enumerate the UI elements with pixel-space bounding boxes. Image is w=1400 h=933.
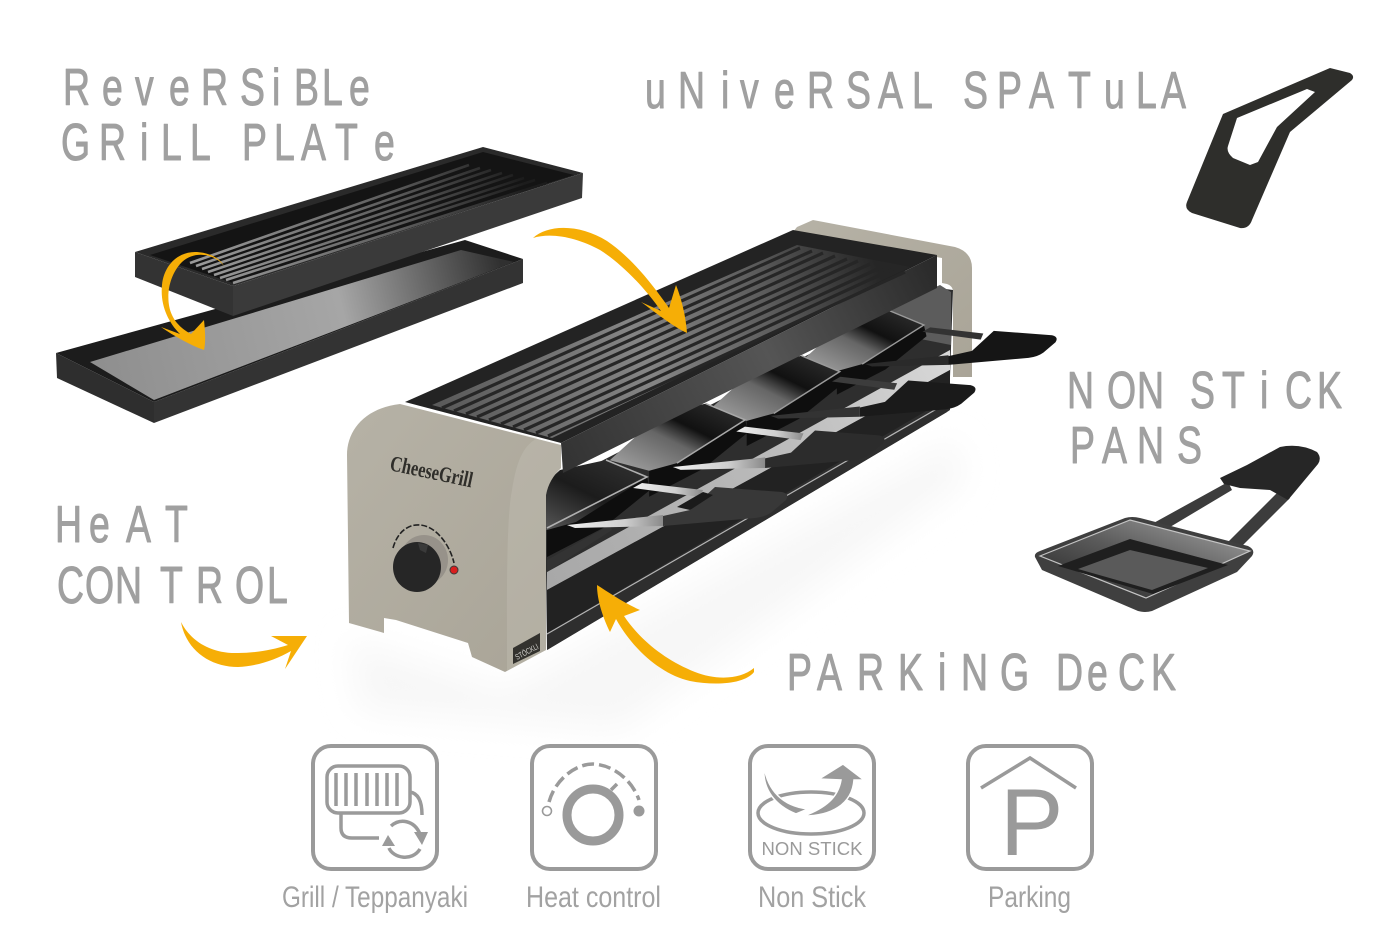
heading: heat control: HeAT [55,495,188,553]
icon: non stick: NON STICK [762,839,862,859]
dial markings [393,525,454,563]
illustration: universal spatula [1186,68,1353,228]
heading: non stick pans [1067,361,1342,474]
parking deck [547,350,950,650]
heading: heat control [55,495,288,614]
grill plate [405,230,937,473]
control knob [393,535,448,592]
label: heat control: Heat control [526,881,661,914]
label: grill / teppanyaki: Grill / Teppanyaki [282,881,468,914]
icon: parking [968,746,1092,876]
handle arms [1150,482,1290,548]
arrow: heat control [181,622,307,669]
icon: non stick [750,746,874,869]
pan floor [1058,539,1228,594]
brand tag [513,633,540,664]
opening interior [545,288,953,650]
heading: reversible grill plate [61,58,395,171]
heading: parking deck: PARKiNG DeCK [787,643,1176,701]
arrow: plate to grill [533,228,687,333]
label: non stick: Non Stick [758,881,867,914]
heading: reversible grill plate: ReveRSiBLe [63,58,370,116]
heading: non stick pans: PANS [1070,416,1202,474]
icon: heat control [532,746,656,869]
heading: universal spatula: uNiveRSAL SPATuLA [645,61,1187,119]
pan and handle 2 [610,404,884,497]
right end panel [793,220,972,377]
handle paddle [1220,446,1320,500]
red indicator light [450,566,458,574]
illustration: lower reversible tray [56,240,523,423]
brand logo: CheeseGrill [388,450,475,492]
brand tag: STÖCKLI [514,642,540,662]
illustration: raclette grill appliance [347,220,1057,672]
illustration: non stick pan [1035,446,1320,612]
heading: heat control: CONTROL [57,556,288,614]
arrow: parking deck [597,585,754,684]
housing highlight [505,431,561,671]
icon: parking: P [1000,770,1063,876]
pan body [1035,517,1253,612]
pan and handle 1 [506,460,787,572]
front beige housing [347,404,561,672]
illustration: upper reversible grill tray [135,147,583,316]
pan wall [1040,520,1250,598]
pan and handle 3 [709,356,976,446]
heading: reversible grill plate: GRiLL PLATe [61,113,395,171]
icon: grill / teppanyaki [313,746,437,869]
heading: non stick pans: NON STiCK [1067,361,1342,419]
arrow: flip plate [161,252,224,350]
pan and handle 4 [801,310,1057,395]
label: parking: Parking [988,881,1071,914]
shadow under appliance [350,440,965,730]
